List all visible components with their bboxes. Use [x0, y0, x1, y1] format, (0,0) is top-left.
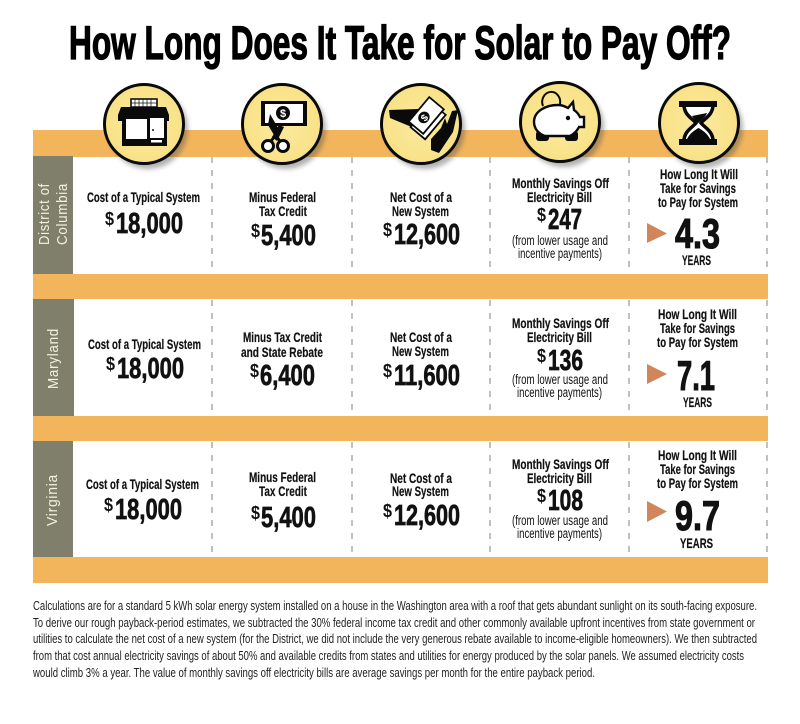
state label: District of [36, 183, 53, 245]
monthly savings: 247 [548, 204, 582, 236]
tax credit and rebate: 6,400 [260, 360, 315, 392]
monthly savings: 108 [548, 485, 583, 517]
monthly savings: incentive payments) [517, 385, 602, 400]
tax credit and rebate: and State Rebate [241, 344, 323, 360]
state label: Maryland [45, 328, 62, 389]
payback time: How Long It Will [660, 166, 738, 182]
payback time [647, 166, 738, 268]
cost of system: 18,000 [117, 353, 184, 385]
net cost: New System [392, 483, 449, 499]
net cost: Net Cost of a [390, 470, 452, 486]
net cost: Net Cost of a [390, 189, 452, 205]
monthly savings [512, 175, 609, 261]
net cost: 11,600 [394, 360, 460, 392]
icon: hand passing money to hand [382, 84, 465, 169]
state label [33, 156, 73, 274]
state label: Virginia [44, 474, 61, 526]
state label [33, 299, 74, 416]
tax credit and rebate: Minus Tax Credit [243, 329, 322, 345]
tax credit: Minus Federal [249, 469, 316, 485]
panel: District of Columbia row [33, 156, 738, 274]
cost of system: $ [106, 354, 115, 374]
monthly savings: Electricity Bill [527, 329, 592, 345]
net cost: $ [383, 361, 392, 381]
net cost: Net Cost of a [390, 329, 452, 345]
payback time: YEARS [682, 252, 711, 268]
state label: Columbia [54, 183, 71, 245]
panel: Maryland row [33, 299, 738, 416]
icon: piggy bank [520, 82, 604, 167]
cost of system: $ [105, 209, 114, 229]
payback time: Take for Savings [660, 461, 735, 477]
footnote text block [32, 599, 757, 680]
state label [33, 441, 73, 557]
monthly savings: incentive payments) [517, 526, 602, 541]
cost of system [87, 189, 200, 240]
monthly savings: 136 [548, 345, 583, 377]
monthly savings: Monthly Savings Off [512, 315, 609, 331]
payback time: Take for Savings [660, 180, 736, 196]
net cost: 12,600 [394, 219, 460, 251]
footnote text block: would climb 3% a year. The value of monthly savings off electricity bills are average savings per month for the entire payback period. [32, 666, 595, 680]
monthly savings: (from lower usage and [512, 372, 608, 387]
tax credit [249, 469, 316, 534]
tax credit: Tax Credit [259, 203, 307, 219]
monthly savings: (from lower usage and [512, 513, 608, 528]
payback time: to Pay for System [658, 194, 738, 210]
cost of system: Cost of a Typical System [87, 189, 200, 205]
payback time: Take for Savings [660, 320, 735, 336]
monthly savings: Monthly Savings Off [512, 175, 609, 191]
icon: scissors cutting a dollar bill: $ [280, 108, 286, 120]
tax credit: 5,400 [261, 502, 316, 534]
monthly savings: Electricity Bill [527, 189, 592, 205]
net cost: $ [383, 220, 392, 240]
cost of system: Cost of a Typical System [88, 336, 201, 352]
tax credit: $ [251, 221, 260, 241]
payback time [647, 306, 738, 410]
icon: house with solar panel [104, 84, 188, 169]
cost of system: $ [104, 495, 113, 515]
cost of system [86, 476, 199, 526]
monthly savings: Electricity Bill [527, 470, 592, 486]
icon: hand passing money to hand: $ [419, 112, 431, 124]
payback time: How Long It Will [658, 306, 737, 322]
payback time: How Long It Will [658, 447, 737, 463]
payback time [647, 447, 738, 551]
tax credit and rebate [241, 329, 323, 392]
payback time: to Pay for System [657, 334, 738, 350]
payback time: to Pay for System [657, 475, 738, 491]
tax credit [249, 189, 316, 252]
net cost: New System [392, 343, 449, 359]
net cost: $ [383, 501, 392, 521]
net cost: 12,600 [394, 500, 460, 532]
monthly savings: Monthly Savings Off [512, 456, 609, 472]
payback time: 7.1 [677, 352, 715, 399]
monthly savings: (from lower usage and [512, 233, 608, 248]
table background [33, 130, 768, 583]
icon: scissors cutting a dollar bill [242, 84, 326, 169]
monthly savings: $ [537, 205, 546, 225]
net cost [383, 189, 460, 251]
panel: Virginia row [33, 441, 738, 557]
tax credit: Tax Credit [259, 483, 307, 499]
cost of system: 18,000 [116, 208, 183, 240]
cost of system: Cost of a Typical System [86, 476, 199, 492]
monthly savings: $ [537, 486, 546, 506]
tax credit and rebate: $ [250, 361, 259, 381]
monthly savings: $ [537, 346, 546, 366]
payback time: YEARS [680, 535, 713, 551]
monthly savings [512, 315, 609, 400]
cost of system: 18,000 [115, 494, 182, 526]
net cost [383, 329, 460, 392]
payback time: 4.3 [675, 210, 720, 257]
tax credit: $ [251, 503, 260, 523]
tax credit: 5,400 [261, 220, 316, 252]
icon: hourglass [660, 84, 743, 168]
tax credit: Minus Federal [249, 189, 316, 205]
payback time: 9.7 [675, 492, 720, 539]
payback time: YEARS [683, 394, 712, 410]
monthly savings: incentive payments) [518, 246, 602, 261]
net cost: New System [392, 203, 449, 219]
net cost [383, 470, 460, 532]
cost of system [88, 336, 201, 385]
monthly savings [512, 456, 609, 541]
